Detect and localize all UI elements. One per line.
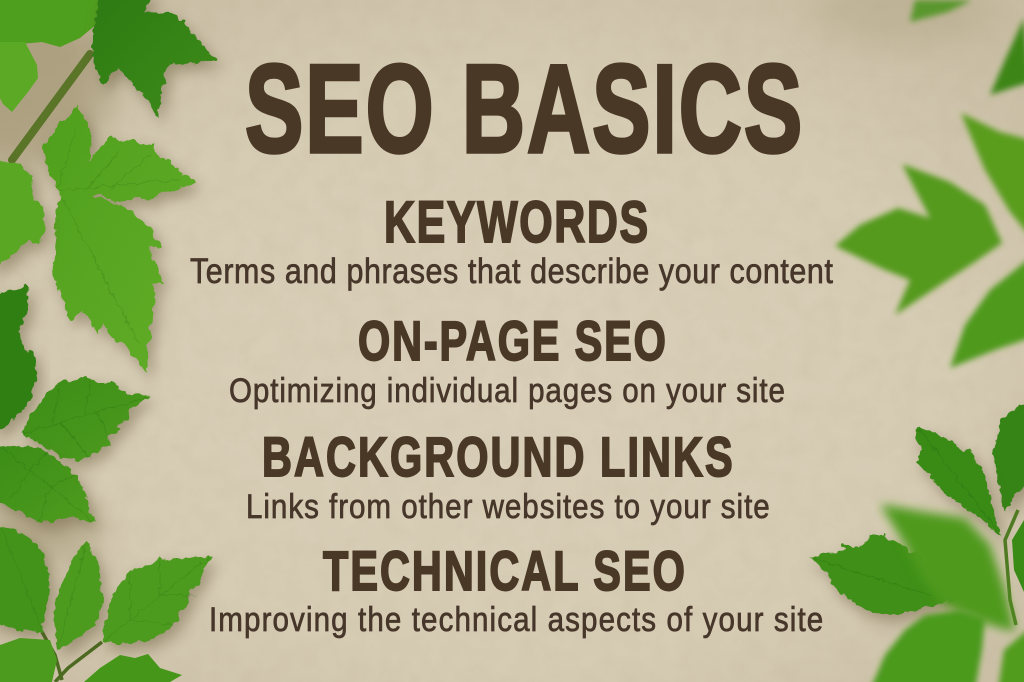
stem: upper left branch (12, 54, 90, 160)
leaf: right edge top of lower cluster (993, 395, 1024, 510)
leaf: blurred upper lobe (961, 113, 1024, 236)
description: background links: Links from other websites to your site (246, 487, 770, 525)
title: SEO BASICS (245, 38, 802, 179)
heading: keywords: KEYWORDS (384, 190, 648, 255)
heading: background links: BACKGROUND LINKS (262, 426, 733, 489)
section: on-page seo (229, 310, 785, 409)
description: technical seo: Improving the technical aspects of your site (209, 600, 823, 638)
leaf: bottom far left (0, 526, 50, 632)
leaf: blurred foreground large (880, 504, 1015, 632)
leaf: blurred middle palmate (835, 164, 1002, 315)
stem: lower right branch (1005, 510, 1018, 625)
heading: technical seo: TECHNICAL SEO (323, 540, 685, 603)
leaf: top left light blob (0, 0, 100, 47)
leaf: left light green (0, 42, 38, 112)
leaf: dark left edge (0, 285, 37, 435)
leaf: large palmate leaf (42, 105, 197, 373)
section: keywords (190, 190, 833, 290)
leaf: bottom corner right (84, 654, 182, 682)
description: on-page seo: Optimizing individual pages on your site (229, 371, 785, 409)
section: background links (246, 426, 770, 525)
leaf: right edge small (1012, 520, 1024, 592)
leaf: lower cluster upper (915, 427, 1002, 537)
leaf: bottom corner left (0, 638, 57, 682)
leaf: blurred top sliver (910, 0, 972, 22)
leaf: blurred bottom centre (870, 610, 985, 682)
heading: on-page seo: ON-PAGE SEO (358, 310, 666, 373)
left foliage cluster (0, 0, 217, 682)
right foliage cluster (810, 0, 1024, 682)
section: technical seo (209, 540, 823, 638)
leaf: lower middle pointing down-right (0, 445, 95, 523)
leaf: blurred bottom corner (998, 628, 1024, 682)
leaf: blurred lower lobe (950, 258, 1024, 368)
description: keywords: Terms and phrases that describe your content (190, 251, 833, 290)
leaf: bottom pointing upper right (102, 556, 212, 644)
leaf: blurred top right (990, 18, 1024, 95)
leaf: lower cluster left pointing (810, 535, 960, 615)
leaf: middle pointing right (22, 376, 152, 461)
leaf: dark top leaf (93, 0, 217, 118)
leaf: mid left (0, 160, 44, 272)
stems: bottom left sprig (42, 632, 102, 682)
leaf: bottom narrow upright (54, 540, 103, 650)
